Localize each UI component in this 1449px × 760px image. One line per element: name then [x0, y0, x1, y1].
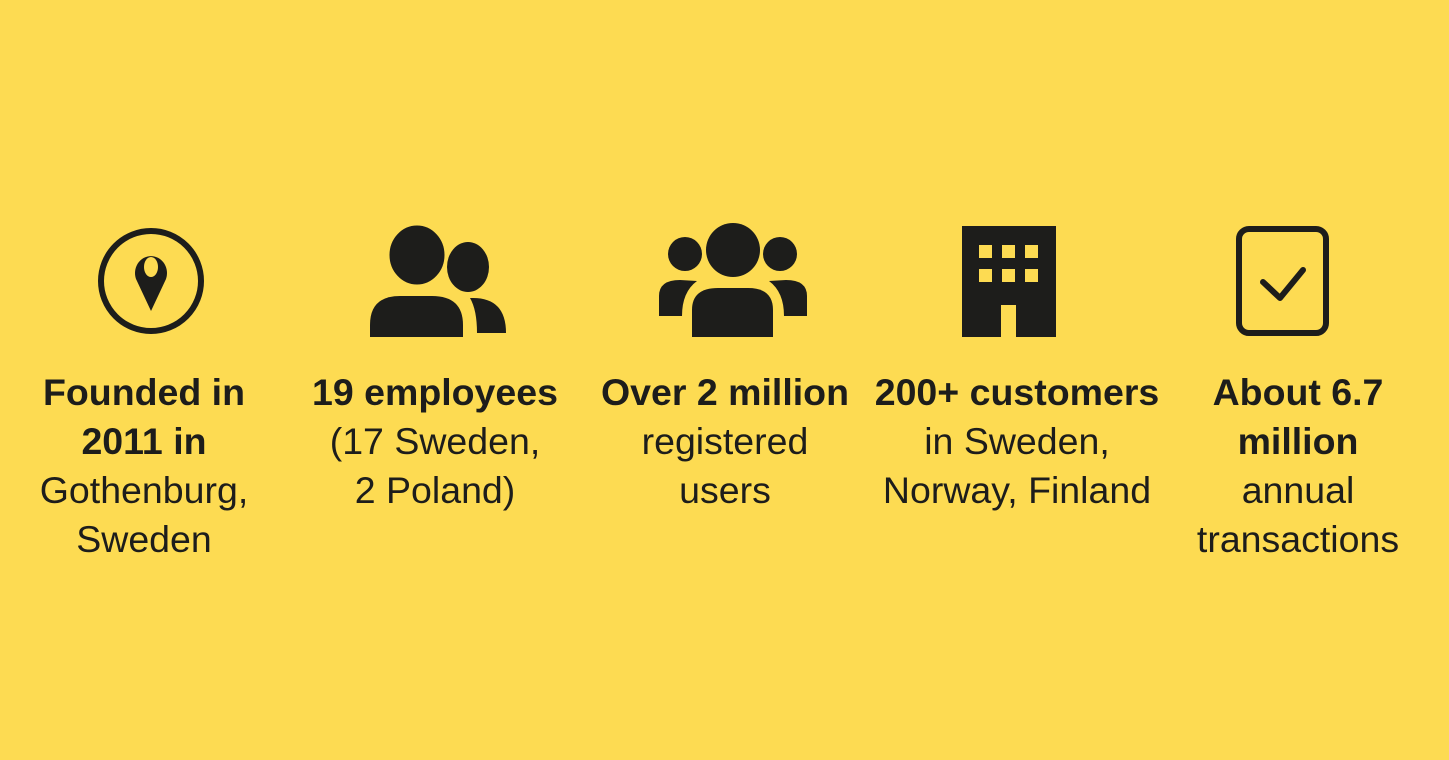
text: customers: in Sweden, — [924, 420, 1110, 462]
text: users: registered — [642, 420, 808, 462]
icon: building — [962, 226, 1056, 337]
text: employees: 2 Poland) — [355, 469, 515, 511]
text: users: Over 2 million — [601, 371, 849, 413]
text: transactions: million — [1238, 420, 1358, 462]
icon: two people — [370, 224, 506, 337]
text: transactions — [1197, 371, 1399, 560]
icon: checkbox — [1239, 229, 1326, 333]
text: founded — [40, 371, 248, 560]
icon: group of three — [659, 223, 807, 337]
text: employees: 19 employees — [312, 371, 558, 413]
text: transactions: About 6.7 — [1213, 371, 1383, 413]
text: employees: (17 Sweden, — [330, 420, 540, 462]
text: transactions: transactions — [1197, 518, 1399, 560]
text: customers — [875, 371, 1159, 511]
text: founded: 2011 in — [81, 420, 207, 462]
text: transactions: annual — [1242, 469, 1354, 511]
icon: location pin — [101, 231, 201, 331]
text: founded: Gothenburg, — [40, 469, 248, 511]
text: founded: Founded in — [43, 371, 245, 413]
text: customers: 200+ customers — [875, 371, 1159, 413]
text: customers: Norway, Finland — [883, 469, 1151, 511]
text: users — [601, 371, 849, 511]
text: users: users — [679, 469, 771, 511]
text: employees — [312, 371, 558, 511]
text: founded: Sweden — [76, 518, 212, 560]
